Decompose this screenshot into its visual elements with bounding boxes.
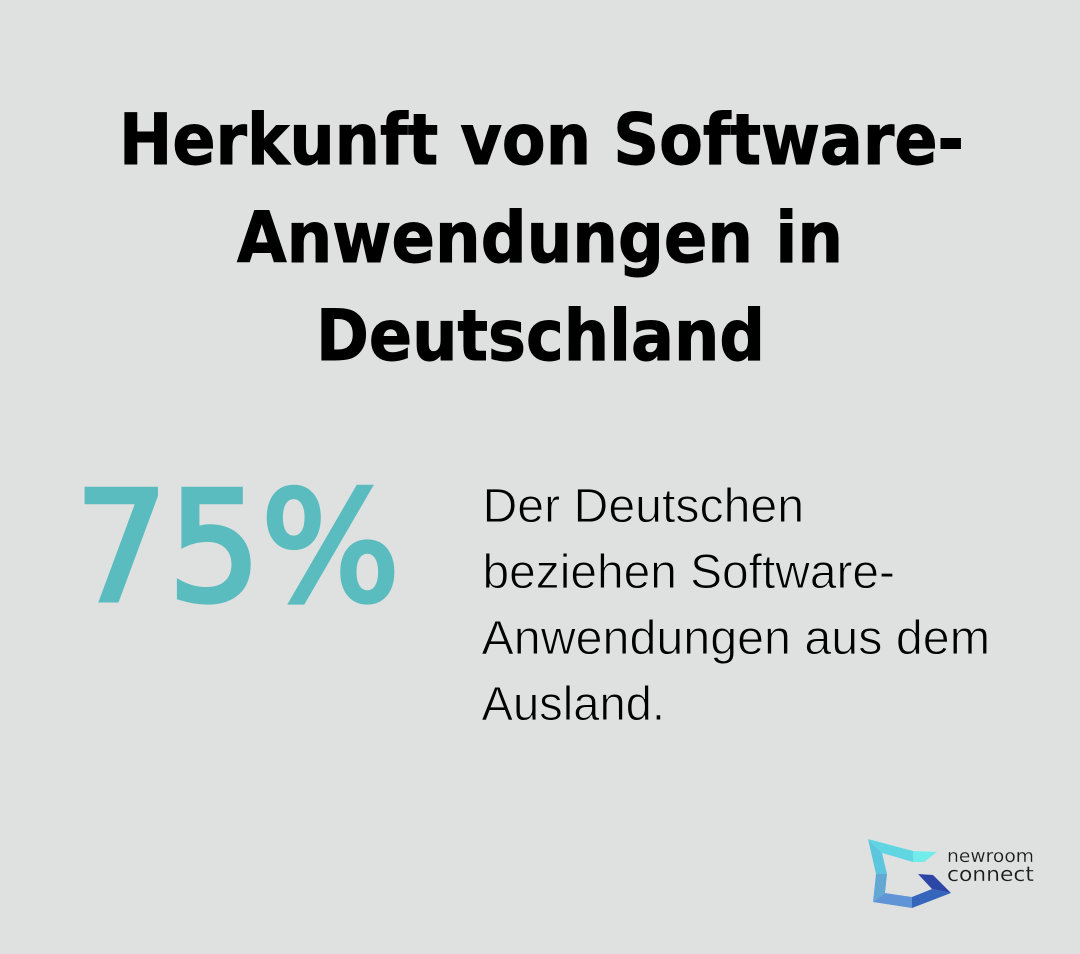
title: Herkunft von Software- <box>119 99 964 181</box>
title: Deutschland <box>316 295 765 377</box>
logo: newroom connect <box>868 839 1034 908</box>
icon: logo mark <box>868 839 951 908</box>
description text: beziehen Software- <box>482 546 895 599</box>
description text <box>482 480 990 731</box>
title <box>119 99 964 377</box>
logo wordmark: newroom <box>947 846 1034 867</box>
description text: Der Deutschen <box>482 480 804 533</box>
logo wordmark <box>947 846 1034 886</box>
big statistic: 75%: 75% <box>75 459 400 636</box>
logo wordmark: connect <box>947 862 1034 886</box>
description text: Ausland. <box>482 678 665 731</box>
description text: Anwendungen aus dem <box>482 612 990 665</box>
title: Anwendungen in <box>237 197 843 279</box>
